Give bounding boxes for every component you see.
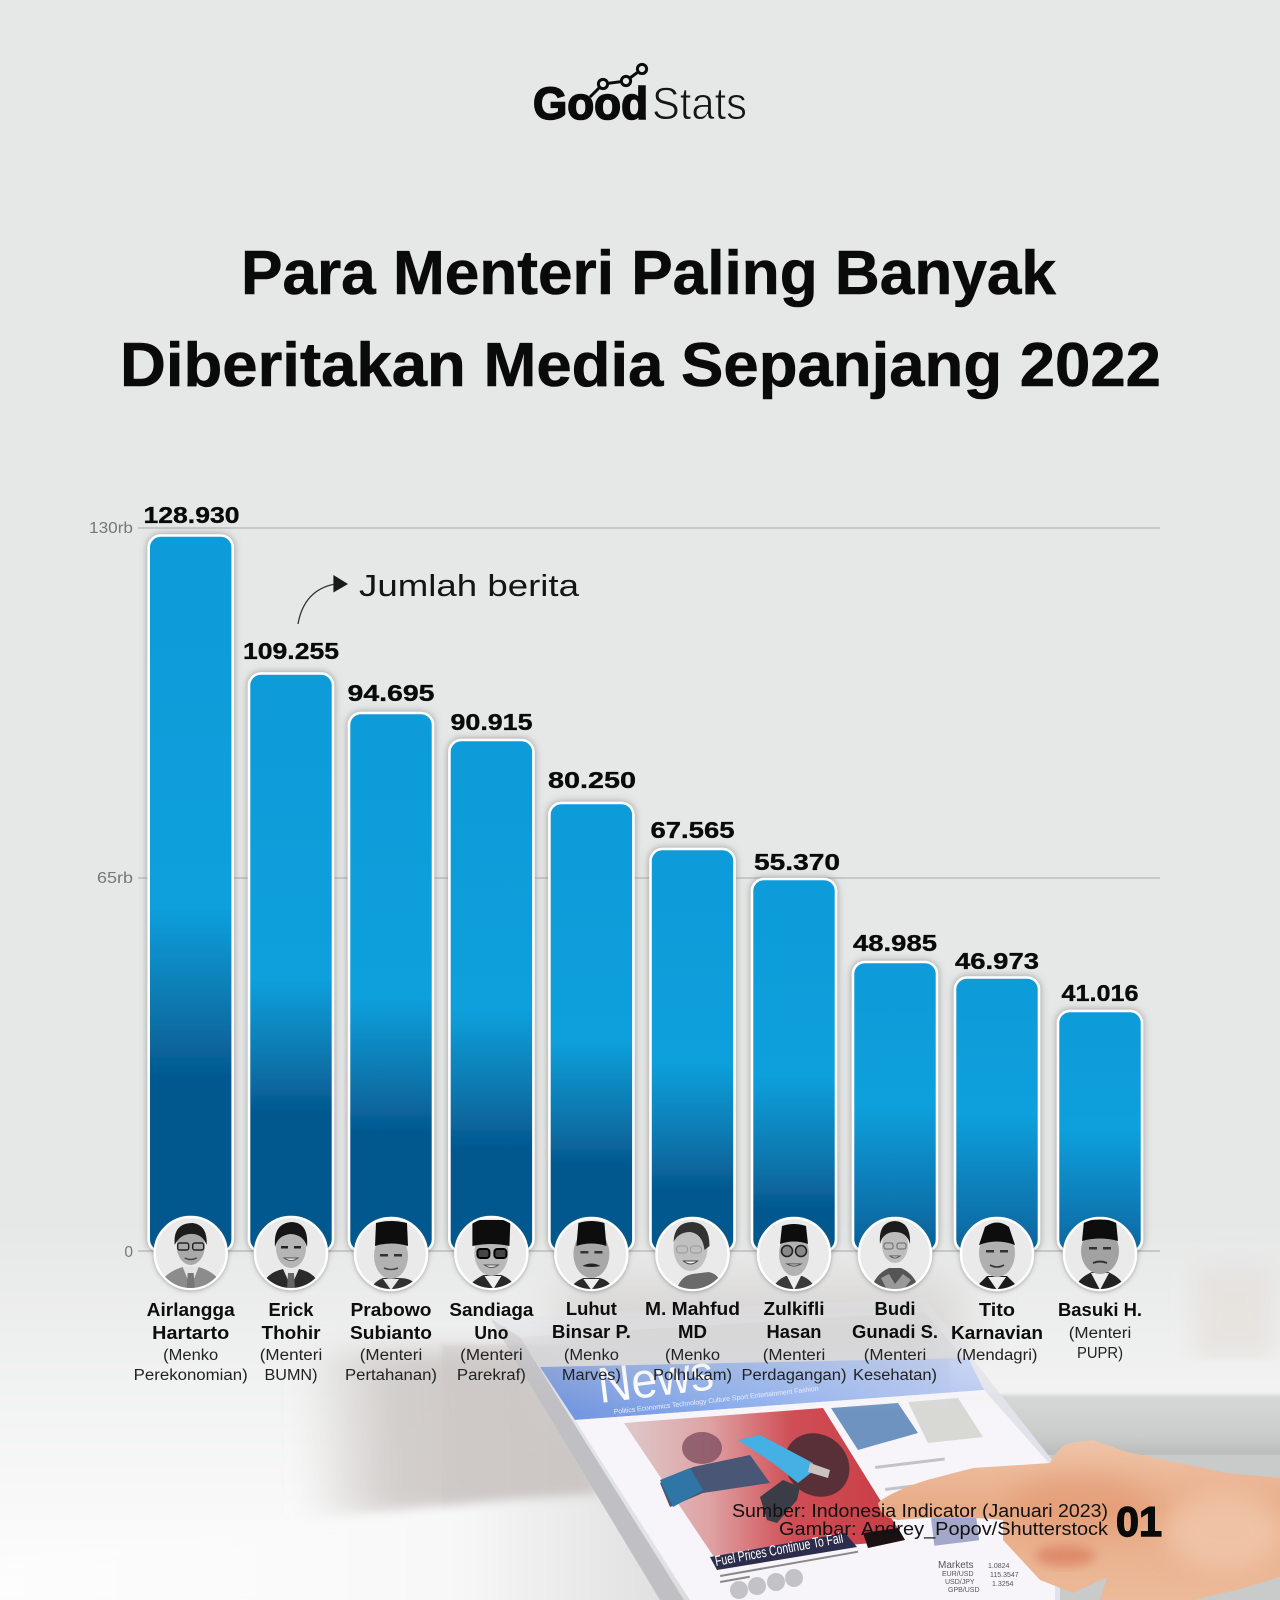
article lines (720, 1457, 979, 1599)
bar: Sandiaga (449, 740, 533, 1252)
bar: Airlangga (149, 536, 233, 1252)
portrait: Basuki (1064, 1218, 1136, 1290)
value labels: 80.250 (548, 767, 636, 793)
portrait: Luhut (555, 1218, 627, 1290)
name: Zulkifli Hasan (742, 1299, 846, 1384)
value labels: 48.985 (853, 930, 937, 956)
bar: Tito (955, 978, 1039, 1252)
logo: GoodStats (533, 64, 747, 129)
value labels: 90.915 (450, 709, 533, 735)
markets table: EUR/USD (942, 1571, 974, 1578)
tablet frame (526, 1322, 1060, 1600)
name: Sandiaga Uno: Parekraf) (457, 1367, 526, 1384)
markets table (938, 1560, 1019, 1594)
markets table: 1.3254 (992, 1581, 1014, 1588)
title (120, 239, 1161, 400)
name: Tito Karnavian: Tito (979, 1300, 1015, 1320)
source credit (732, 1501, 1109, 1540)
arrow (298, 575, 348, 624)
name: Airlangga Hartarto (134, 1300, 248, 1384)
name: Erick Thohir: Erick (268, 1300, 314, 1320)
caption band: Fuel Prices Continue To Fall (714, 1531, 845, 1570)
name: Luhut Binsar P.: Marves) (562, 1367, 621, 1384)
name: Zulkifli Hasan: Zulkifli (764, 1299, 824, 1319)
portrait: Mahfud (656, 1218, 728, 1290)
markets table: USD/JPY (945, 1579, 975, 1586)
name: Budi Gunadi S.: Kesehatan) (853, 1367, 937, 1384)
name: Luhut Binsar P.: Binsar P. (552, 1322, 631, 1342)
portrait: Erick (255, 1217, 327, 1289)
name: Prabowo Subianto: Prabowo (350, 1300, 432, 1320)
name: M. Mahfud MD: MD (678, 1322, 707, 1342)
value labels: 109.255 (243, 638, 339, 664)
name: Sandiaga Uno (449, 1300, 534, 1384)
value labels: 67.565 (650, 817, 735, 843)
name: Zulkifli Hasan: (Menteri (763, 1347, 825, 1364)
solar panel photo (831, 1403, 918, 1450)
name: Prabowo Subianto: Pertahanan) (345, 1367, 437, 1384)
name: Sandiaga Uno: Sandiaga (449, 1300, 534, 1320)
main fuel photo (624, 1408, 905, 1557)
name: Basuki H.: (Menteri (1069, 1325, 1131, 1342)
bar: Zulkifli (752, 879, 836, 1252)
name: Basuki H. (1058, 1300, 1142, 1362)
name: Prabowo Subianto: (Menteri (360, 1347, 422, 1364)
name: M. Mahfud MD: M. Mahfud (645, 1299, 740, 1319)
y axis grid and labels: 0 (124, 1244, 133, 1261)
name: Budi Gunadi S. (852, 1299, 938, 1384)
name: Tito Karnavian: Karnavian (951, 1323, 1043, 1343)
name: Basuki H.: PUPR) (1077, 1345, 1123, 1362)
bar: Erick (249, 674, 333, 1252)
portrait: Sandiaga (455, 1217, 527, 1289)
name: Airlangga Hartarto: Perekonomian) (134, 1367, 248, 1384)
name: Airlangga Hartarto: Hartarto (152, 1323, 229, 1343)
annotation: Jumlah berita: Jumlah berita (359, 568, 580, 603)
value labels: 46.973 (955, 948, 1039, 974)
annotation: Jumlah berita (298, 568, 580, 624)
logo graph icon (590, 64, 647, 97)
name: Luhut Binsar P.: (Menko (564, 1347, 619, 1364)
logo: GoodStats: Stats (652, 78, 747, 129)
bar: Budi (853, 962, 937, 1252)
y axis grid and labels (89, 520, 1160, 1261)
name: Tito Karnavian: (Mendagri) (956, 1347, 1038, 1364)
value labels: 128.930 (144, 502, 240, 528)
name: Prabowo Subianto: Subianto (350, 1323, 432, 1343)
bar chart (149, 536, 1142, 1252)
name: Luhut Binsar P.: Luhut (566, 1299, 617, 1319)
markets table: 1.0824 (988, 1563, 1010, 1570)
second photo (908, 1398, 983, 1443)
y axis grid and labels: 65rb (97, 870, 133, 887)
tablet screen page (575, 1390, 1055, 1600)
name: Zulkifli Hasan: Hasan (766, 1322, 822, 1342)
bar: Prabowo (349, 713, 433, 1252)
value labels: 41.016 (1062, 980, 1138, 1006)
name: Luhut Binsar P. (552, 1299, 631, 1384)
name: Tito Karnavian (951, 1300, 1043, 1364)
portrait: Budi (859, 1218, 931, 1290)
value labels: 94.695 (348, 680, 435, 706)
tablet photo (490, 1298, 1060, 1600)
name: Airlangga Hartarto: (Menko (163, 1347, 218, 1364)
tablet screen header (540, 1358, 984, 1420)
markets table: 115.3547 (990, 1572, 1019, 1579)
bar: Mahfud (650, 849, 734, 1252)
name: Budi Gunadi S.: Gunadi S. (852, 1322, 938, 1342)
value labels (144, 502, 1138, 1006)
name: Sandiaga Uno: Uno (474, 1323, 508, 1343)
portrait: Airlangga (155, 1217, 227, 1289)
name: Sandiaga Uno: (Menteri (460, 1347, 523, 1364)
name: Budi Gunadi S.: Budi (874, 1299, 916, 1319)
bar: Luhut (549, 803, 633, 1252)
page number: 01 (1116, 1498, 1162, 1545)
name: Prabowo Subianto (345, 1300, 437, 1384)
name: M. Mahfud MD: (Menko (665, 1347, 720, 1364)
name: M. Mahfud MD (645, 1299, 740, 1384)
bar: Basuki (1058, 1011, 1142, 1252)
name: Basuki H.: Basuki H. (1058, 1300, 1142, 1320)
logo: GoodStats: Good (533, 78, 648, 129)
title: Diberitakan Media Sepanjang 2022 (120, 331, 1161, 400)
y axis grid and labels: 130rb (89, 520, 133, 537)
title: Para Menteri Paling Banyak (241, 239, 1057, 308)
value labels: 55.370 (754, 849, 840, 875)
source credit: Sumber: Indonesia Indicator (Januari 2023) (732, 1501, 1108, 1521)
minister names (134, 1299, 1142, 1384)
name: M. Mahfud MD: Polhukam) (653, 1367, 732, 1384)
markets table: Markets (938, 1560, 974, 1571)
name: Zulkifli Hasan: Perdagangan) (742, 1367, 846, 1384)
name: Budi Gunadi S.: (Menteri (864, 1347, 926, 1364)
name: Erick Thohir (260, 1300, 322, 1384)
name: Airlangga Hartarto: Airlangga (147, 1300, 236, 1320)
name: Erick Thohir: Thohir (262, 1323, 320, 1343)
markets table: GPB/USD (948, 1587, 980, 1594)
hand (860, 1430, 1280, 1600)
News masthead: News (595, 1344, 716, 1414)
portrait: Tito (961, 1218, 1033, 1290)
source credit: Gambar: Andrey_Popov/Shutterstock (779, 1519, 1109, 1540)
navigation links: Politics Economics Technology Culture Sport Entertainment Fashion (613, 1386, 819, 1416)
caption band (710, 1531, 857, 1570)
name: Erick Thohir: (Menteri (260, 1347, 322, 1364)
portrait: Zulkifli (758, 1218, 830, 1290)
name: Erick Thohir: BUMN) (264, 1367, 318, 1384)
portrait: Prabowo (355, 1218, 427, 1290)
